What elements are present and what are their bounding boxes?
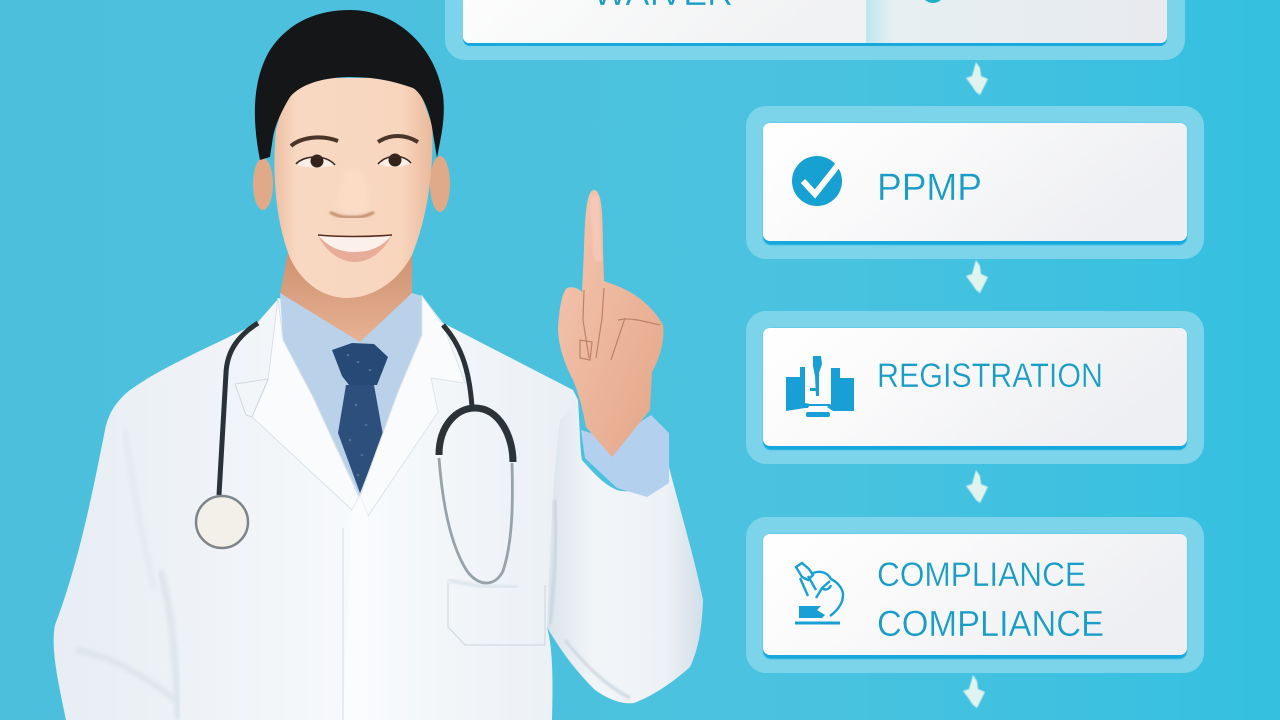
panel: compliance step bbox=[746, 517, 1204, 673]
panel: waiver step bbox=[445, 0, 1185, 60]
heading: compliance line two: COMPLIANCE bbox=[877, 603, 1104, 644]
arrow: PPMP to registration bbox=[966, 260, 988, 293]
pocket bbox=[448, 583, 545, 645]
chest piece bbox=[196, 496, 248, 548]
eyebrows bbox=[291, 136, 418, 146]
heading: registration: REGISTRATION bbox=[877, 357, 1103, 395]
placket bbox=[343, 496, 368, 720]
shirt bbox=[280, 293, 422, 497]
left lapel bbox=[252, 298, 359, 510]
smile bbox=[318, 235, 392, 262]
figure: doctor pointing up bbox=[54, 10, 703, 720]
icon: clipped circle bbox=[921, 0, 945, 3]
icon: microscope bbox=[795, 563, 843, 623]
ears bbox=[253, 158, 273, 210]
face bbox=[274, 78, 432, 298]
arrow: after compliance bbox=[963, 675, 985, 708]
icon: registration building bbox=[786, 356, 854, 417]
stethoscope bbox=[196, 323, 513, 583]
arrow: waiver to PPMP bbox=[966, 62, 988, 95]
panel: registration step bbox=[746, 311, 1204, 464]
icon: check badge bbox=[792, 156, 842, 206]
hand pointing bbox=[558, 190, 663, 457]
nose bbox=[335, 170, 371, 214]
heading: compliance line one: COMPLIANCE bbox=[877, 556, 1086, 594]
right sleeve bbox=[547, 400, 703, 703]
arrow: registration to compliance bbox=[966, 470, 988, 503]
panel: PPMP step bbox=[746, 106, 1204, 259]
neck bbox=[280, 240, 412, 345]
hair bbox=[255, 10, 444, 160]
right lapel bbox=[360, 296, 465, 516]
shirt cuff bbox=[581, 415, 669, 497]
coat body bbox=[54, 296, 578, 720]
eyes bbox=[296, 154, 411, 168]
left collar notch bbox=[235, 379, 268, 417]
tie bbox=[332, 343, 388, 493]
heading: PPMP: PPMP bbox=[877, 167, 982, 209]
left arm shading bbox=[160, 570, 178, 720]
